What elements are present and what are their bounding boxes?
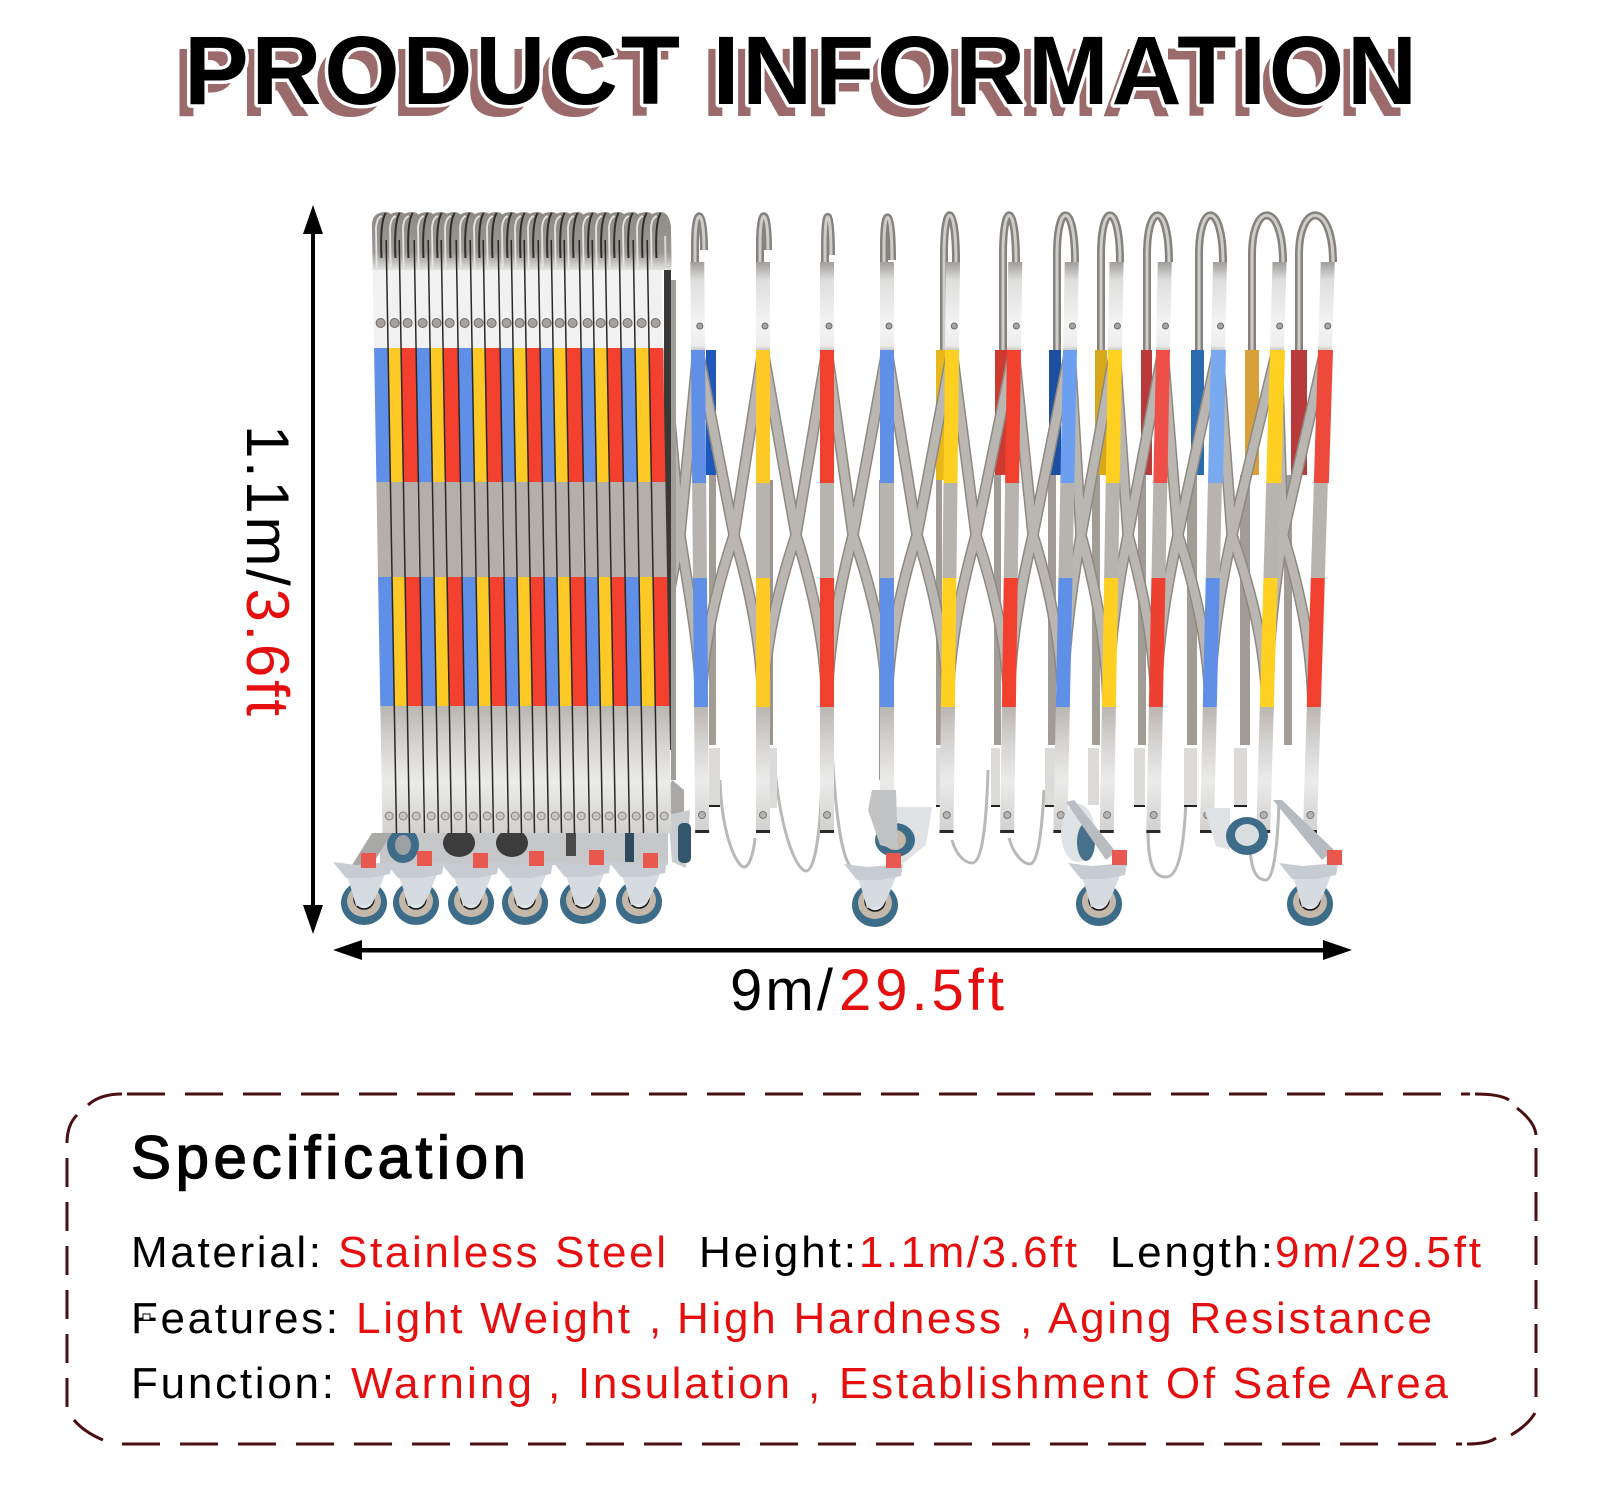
width arrow (333, 940, 1352, 960)
line: function: Establishment Of Safe Area (839, 1359, 1449, 1408)
rear casters (352, 790, 1334, 868)
line: features: High Hardness (677, 1294, 1001, 1343)
title: PRODUCT INFORMATION (173, 28, 1407, 137)
height label: 1.1m/ 3.6ft (234, 425, 301, 716)
line: function: , (548, 1359, 560, 1408)
line: features (131, 1294, 1432, 1343)
barrier photo illustration (333, 212, 1342, 927)
colored front posts (690, 262, 1336, 833)
line: material, height, length: 1.1m/3.6ft (859, 1228, 1077, 1277)
width label (730, 958, 1004, 1023)
line: function: , (808, 1359, 820, 1408)
dashed border (67, 1094, 1536, 1444)
line: function (131, 1359, 1449, 1408)
line: features: Aging Resistance (1048, 1294, 1432, 1343)
line: material, height, length (131, 1228, 1481, 1277)
line: material, height, length: Stainless Steel (338, 1228, 666, 1277)
folded stack of strips (372, 212, 681, 833)
line: features: , (1020, 1294, 1032, 1343)
height arrow (303, 205, 323, 934)
front casters (333, 850, 1342, 927)
scissor lattice diagonals (664, 350, 1325, 715)
line: material, height, length: Height: (699, 1228, 856, 1277)
line: features: Light Weight (356, 1294, 630, 1343)
line: features: , (649, 1294, 661, 1343)
title: PRODUCT INFORMATION (184, 16, 1417, 125)
width label: 9m/ (730, 958, 834, 1023)
title: PRODUCT INFORMATION (184, 16, 1417, 125)
line: material, height, length: Length: (1110, 1228, 1273, 1277)
specification panel (67, 1094, 1536, 1444)
line: material, height, length: 9m/29.5ft (1275, 1228, 1481, 1277)
line: function: Function: (131, 1359, 334, 1408)
width label: 29.5ft (839, 958, 1004, 1023)
line: function: Warning (351, 1359, 532, 1408)
chain loops (720, 750, 1279, 880)
line: material, height, length: Material: (131, 1228, 321, 1277)
line: features: Features: (131, 1294, 338, 1343)
hooks (695, 215, 1333, 350)
line: function: Insulation (578, 1359, 790, 1408)
secondary rear members (706, 350, 1307, 808)
heading: Specification (131, 1124, 526, 1191)
rear dark frame beside stack (664, 270, 684, 815)
